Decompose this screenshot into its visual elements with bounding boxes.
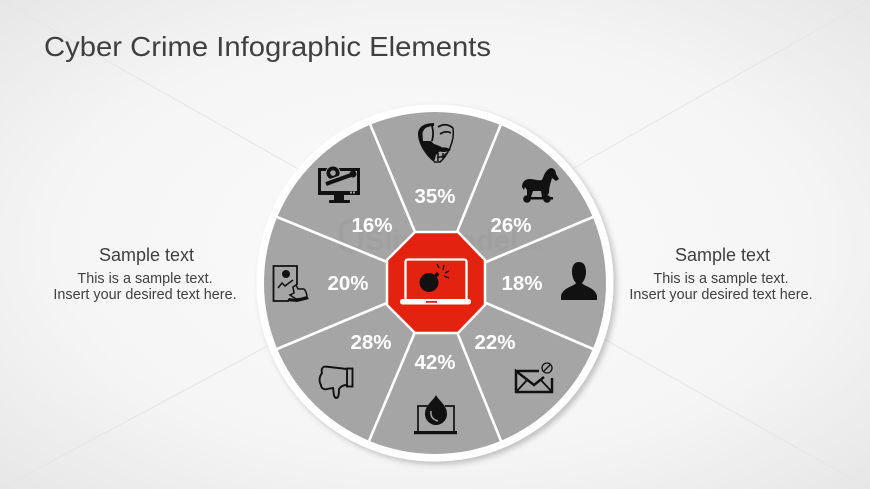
label 28%: 28% [350,331,392,354]
right body [629,271,813,303]
title: Cyber Crime Infographic Elements [44,31,491,62]
right body: This is a sample text. [653,271,789,287]
segment: 28% [320,331,392,398]
left body: Insert your desired text here. [53,287,237,303]
icon: anonymous mask [418,123,453,162]
segment: 18% [501,262,597,300]
segment: 35% [414,123,456,208]
segment dividers [277,124,593,441]
right text block [629,245,813,303]
label 42%: 42% [414,351,456,374]
segment: 42% [414,351,457,434]
centre octagon [387,232,485,333]
icon: tablet with hand [274,266,309,302]
icon: monitor with gears and wrench [318,166,360,203]
label 26%: 26% [490,214,532,237]
icon: blocked mail [516,363,552,392]
label 16%: 16% [351,214,393,237]
label 22%: 22% [474,331,516,354]
left body: This is a sample text. [77,271,213,287]
icon: user silhouette [561,262,597,300]
wheel grey disc [264,112,606,454]
icon: laptop with drop [414,395,457,434]
segment: 26% [490,168,559,237]
label 35%: 35% [414,185,456,208]
segment: 16% [318,166,393,237]
icon: laptop with bomb [400,260,471,304]
icon: thumbs down [320,366,352,398]
segment: 22% [474,331,552,392]
icon: trojan horse [522,168,559,203]
right body: Insert your desired text here. [629,287,813,303]
segment: 20% [274,266,369,302]
wheel outer white ring [256,104,614,462]
label 20%: 20% [327,272,369,295]
right heading: Sample text [675,245,770,265]
watermark: SlideModel [365,225,518,257]
left body [53,271,237,303]
left text block [53,245,237,303]
watermark: .com [513,238,541,253]
left heading: Sample text [99,245,194,265]
watermark [341,221,541,257]
label 18%: 18% [501,272,543,295]
